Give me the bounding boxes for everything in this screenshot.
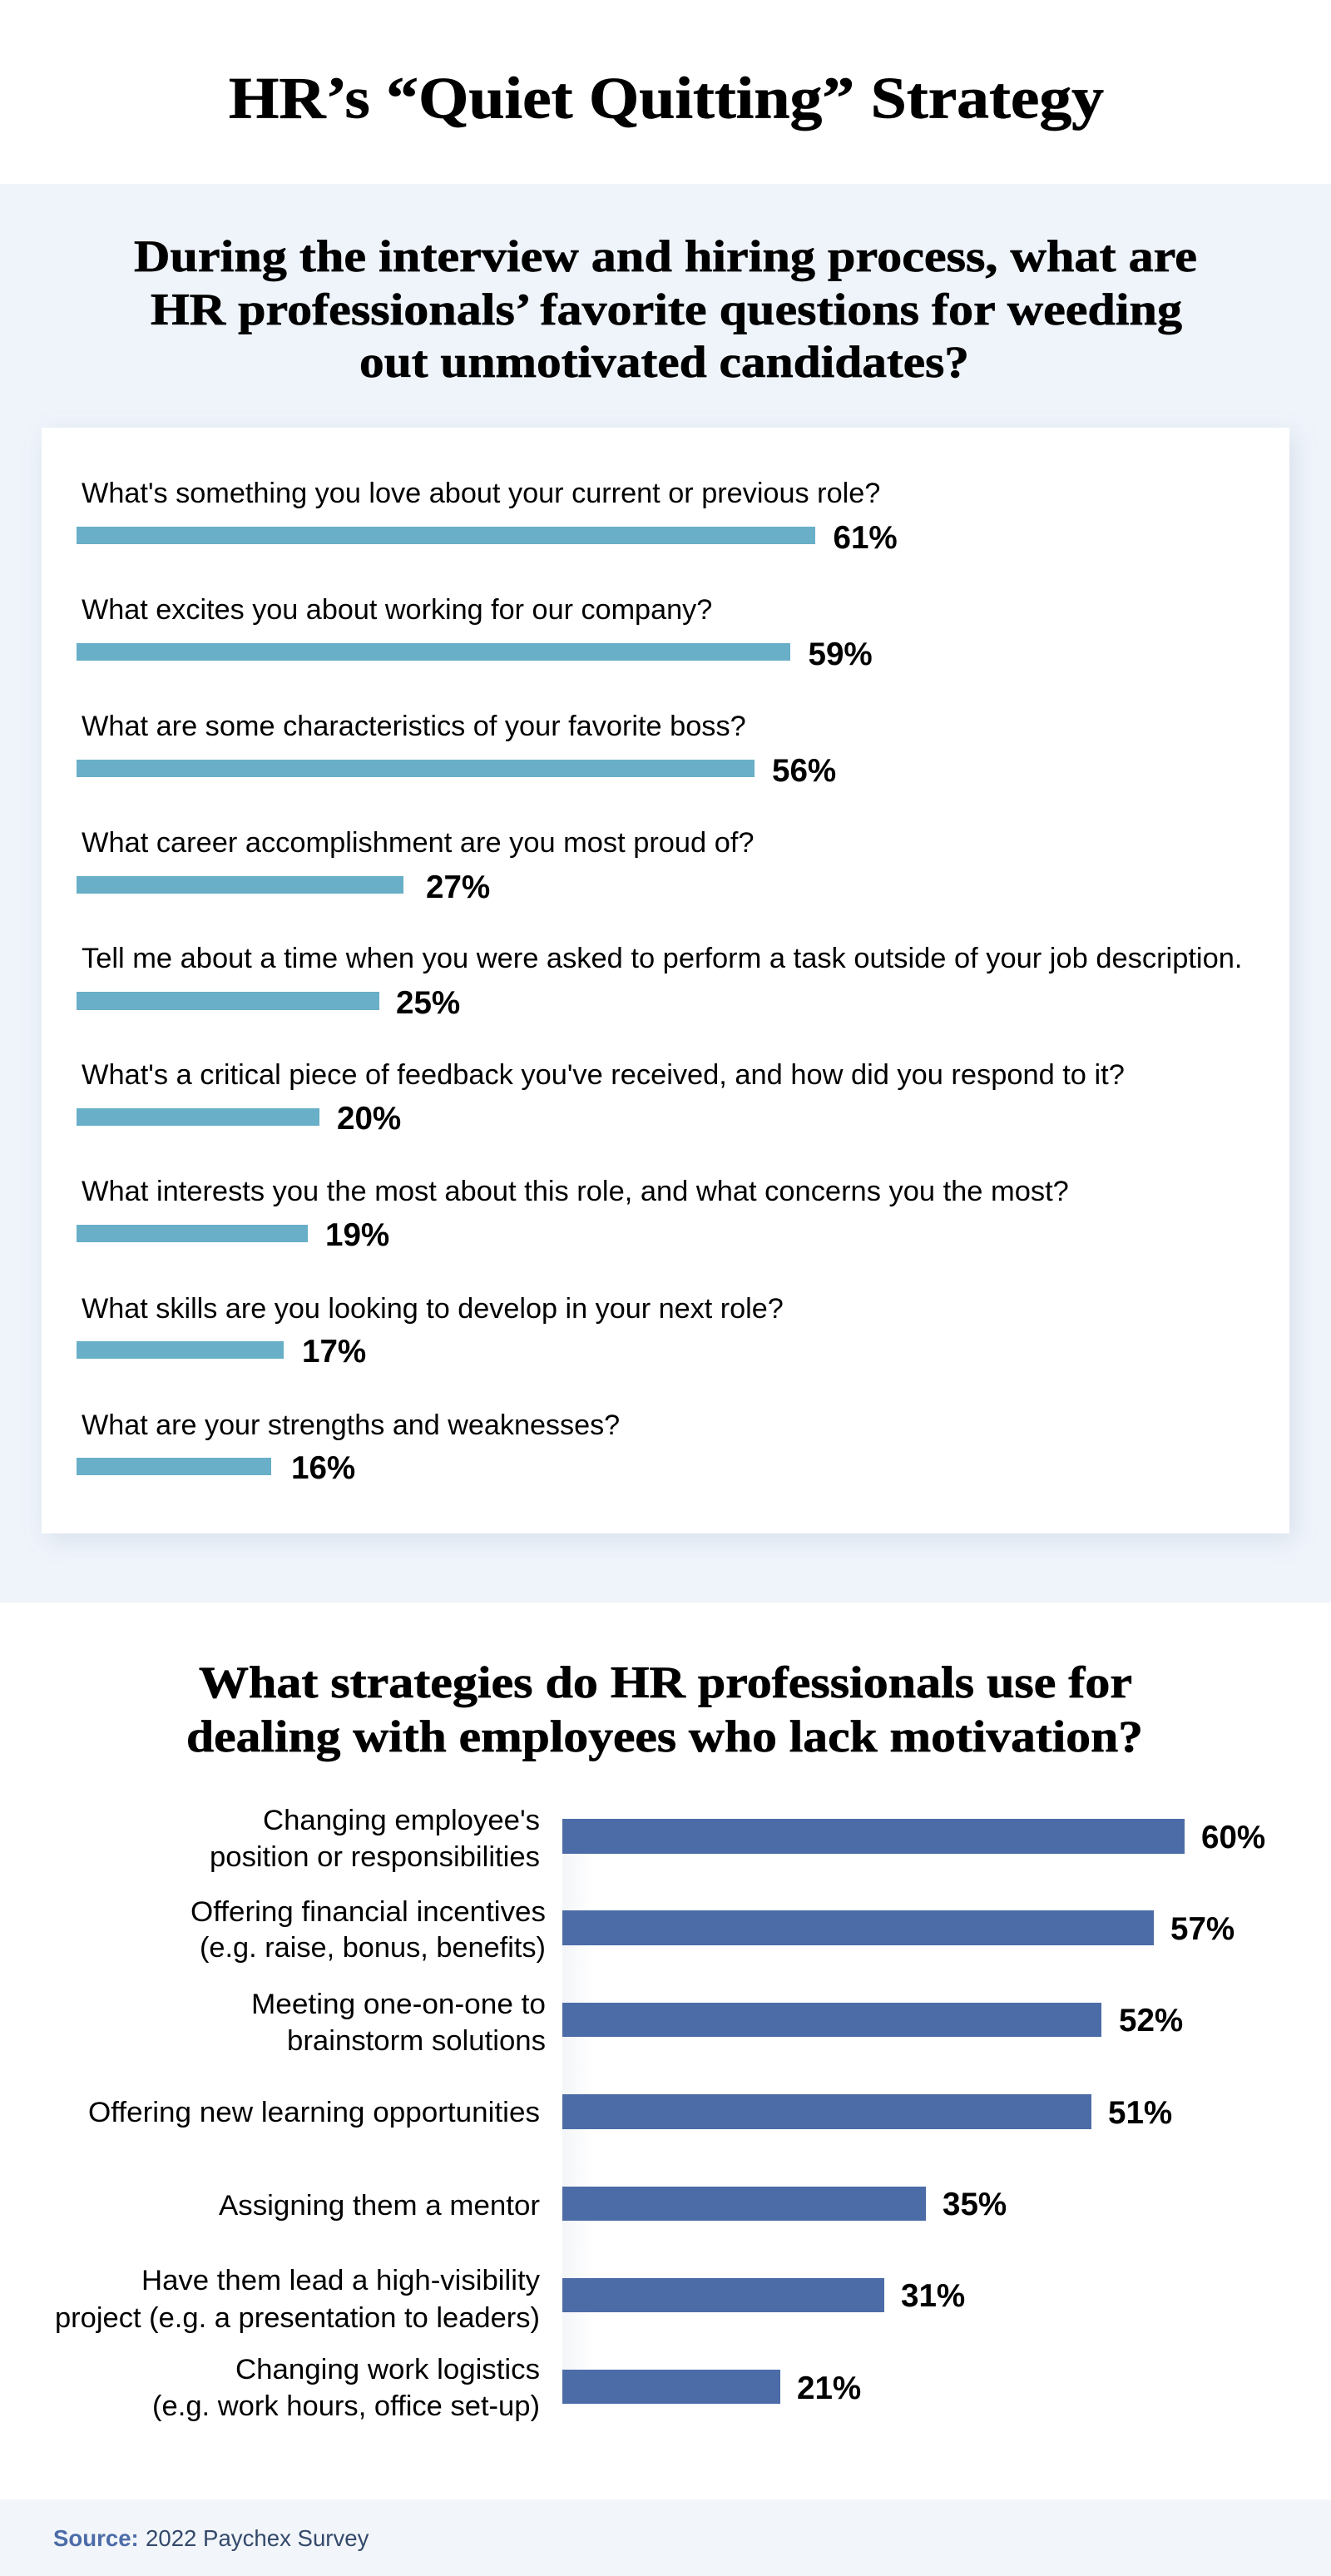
card: question bar chart	[42, 428, 1289, 1533]
bar row: 31%	[55, 2265, 965, 2334]
bar row: 60%: position or responsibilities	[210, 1841, 540, 1873]
bar row: 57%	[190, 1896, 1235, 1964]
bar row: 25%: 25%	[396, 985, 460, 1021]
bar row: 35%	[219, 2187, 1007, 2222]
bar row: 35%: Assigning them a mentor	[219, 2190, 540, 2222]
bar row: 59%	[77, 594, 873, 672]
bar row: 57%: 57%	[1170, 1911, 1235, 1947]
bar row: 25%	[77, 943, 1242, 1021]
heading: strategies	[186, 1657, 1143, 1761]
bar row: 60%: Changing employee's	[263, 1805, 540, 1836]
footer: source: Source:	[53, 2525, 139, 2551]
bar row: 61%: What's something you love about your current or previous role?	[82, 478, 880, 509]
bar row: 17%: 17%	[302, 1334, 366, 1370]
bar row: 60%	[210, 1805, 1265, 1873]
bar row: 17%: What skills are you looking to develop in your next role?	[82, 1293, 784, 1325]
bar row: 19%: What interests you the most about this role, and what concerns you the most?	[82, 1176, 1069, 1207]
bar row: 61%	[77, 478, 898, 556]
bar row: 51%: Offering new learning opportunities	[88, 2097, 540, 2128]
panel: interview questions	[0, 184, 1331, 1603]
bar row: 21%: 21%	[797, 2370, 861, 2406]
bar row: 52%	[251, 1989, 1183, 2057]
bar row: 20%: 20%	[337, 1101, 401, 1137]
bar row: 35%: 35%	[943, 2187, 1007, 2222]
heading: interview questions: During the interview and hiring process, what are	[134, 231, 1197, 281]
bar row: 57%: Offering financial incentives	[190, 1896, 546, 1928]
bar row: 21%: (e.g. work hours, office set-up)	[152, 2390, 540, 2422]
bar row: 56%: 56%	[772, 753, 836, 789]
bar row: 61%: 61%	[834, 520, 898, 556]
bar row: 21%: Changing work logistics	[235, 2354, 540, 2385]
bar row: 16%: What are your strengths and weaknesses?	[82, 1409, 620, 1441]
bar row: 31%: 31%	[901, 2278, 965, 2314]
bar row: 21%	[152, 2354, 861, 2422]
footer: source: 2022 Paychex Survey	[146, 2525, 369, 2551]
heading: interview questions	[134, 231, 1197, 387]
heading: interview questions: out unmotivated candidates?	[359, 337, 969, 387]
bar row: 20%	[77, 1059, 1125, 1137]
heading: strategies: What strategies do HR professionals use for	[199, 1657, 1132, 1707]
bar row: 16%: 16%	[291, 1450, 355, 1486]
bar row: 59%: What excites you about working for our company?	[82, 594, 712, 626]
title: HR’s “Quiet Quitting” Strategy	[229, 67, 1104, 131]
bar chart: strategies	[55, 1805, 1265, 2422]
bar row: 51%: 51%	[1108, 2095, 1172, 2131]
bar row: 31%: Have them lead a high-visibility	[141, 2265, 541, 2296]
bar row: 52%: 52%	[1119, 2003, 1183, 2039]
bar row: 57%: (e.g. raise, bonus, benefits)	[200, 1932, 546, 1964]
bar row: 19%	[77, 1176, 1069, 1253]
bar row: 27%: 27%	[426, 869, 490, 905]
bar row: 60%: 60%	[1201, 1820, 1265, 1855]
bar row: 27%	[77, 827, 755, 905]
bar row: 51%	[88, 2094, 1172, 2131]
bar row: 20%: What's a critical piece of feedback you've received, and how did you respond to it?	[82, 1059, 1125, 1091]
bar row: 59%: 59%	[809, 637, 873, 672]
heading: interview questions: HR professionals’ favorite questions for weeding	[151, 285, 1182, 334]
bar row: 19%: 19%	[325, 1217, 389, 1253]
bar row: 27%: What career accomplishment are you most proud of?	[82, 827, 755, 859]
bar row: 17%	[77, 1293, 784, 1370]
bar row: 56%: What are some characteristics of your favorite boss?	[82, 711, 746, 742]
bar row: 16%	[77, 1409, 620, 1486]
bar row: 52%: Meeting one-on-one to	[251, 1989, 546, 2020]
bar row: 31%: project (e.g. a presentation to leaders)	[55, 2302, 540, 2334]
heading: strategies: dealing with employees who lack motivation?	[186, 1712, 1143, 1761]
bar row: 56%	[77, 711, 836, 789]
footer: source	[0, 2499, 1331, 2576]
bar row: 25%: Tell me about a time when you were asked to perform a task outside of your job description.	[82, 943, 1242, 974]
bar row: 52%: brainstorm solutions	[287, 2025, 546, 2057]
